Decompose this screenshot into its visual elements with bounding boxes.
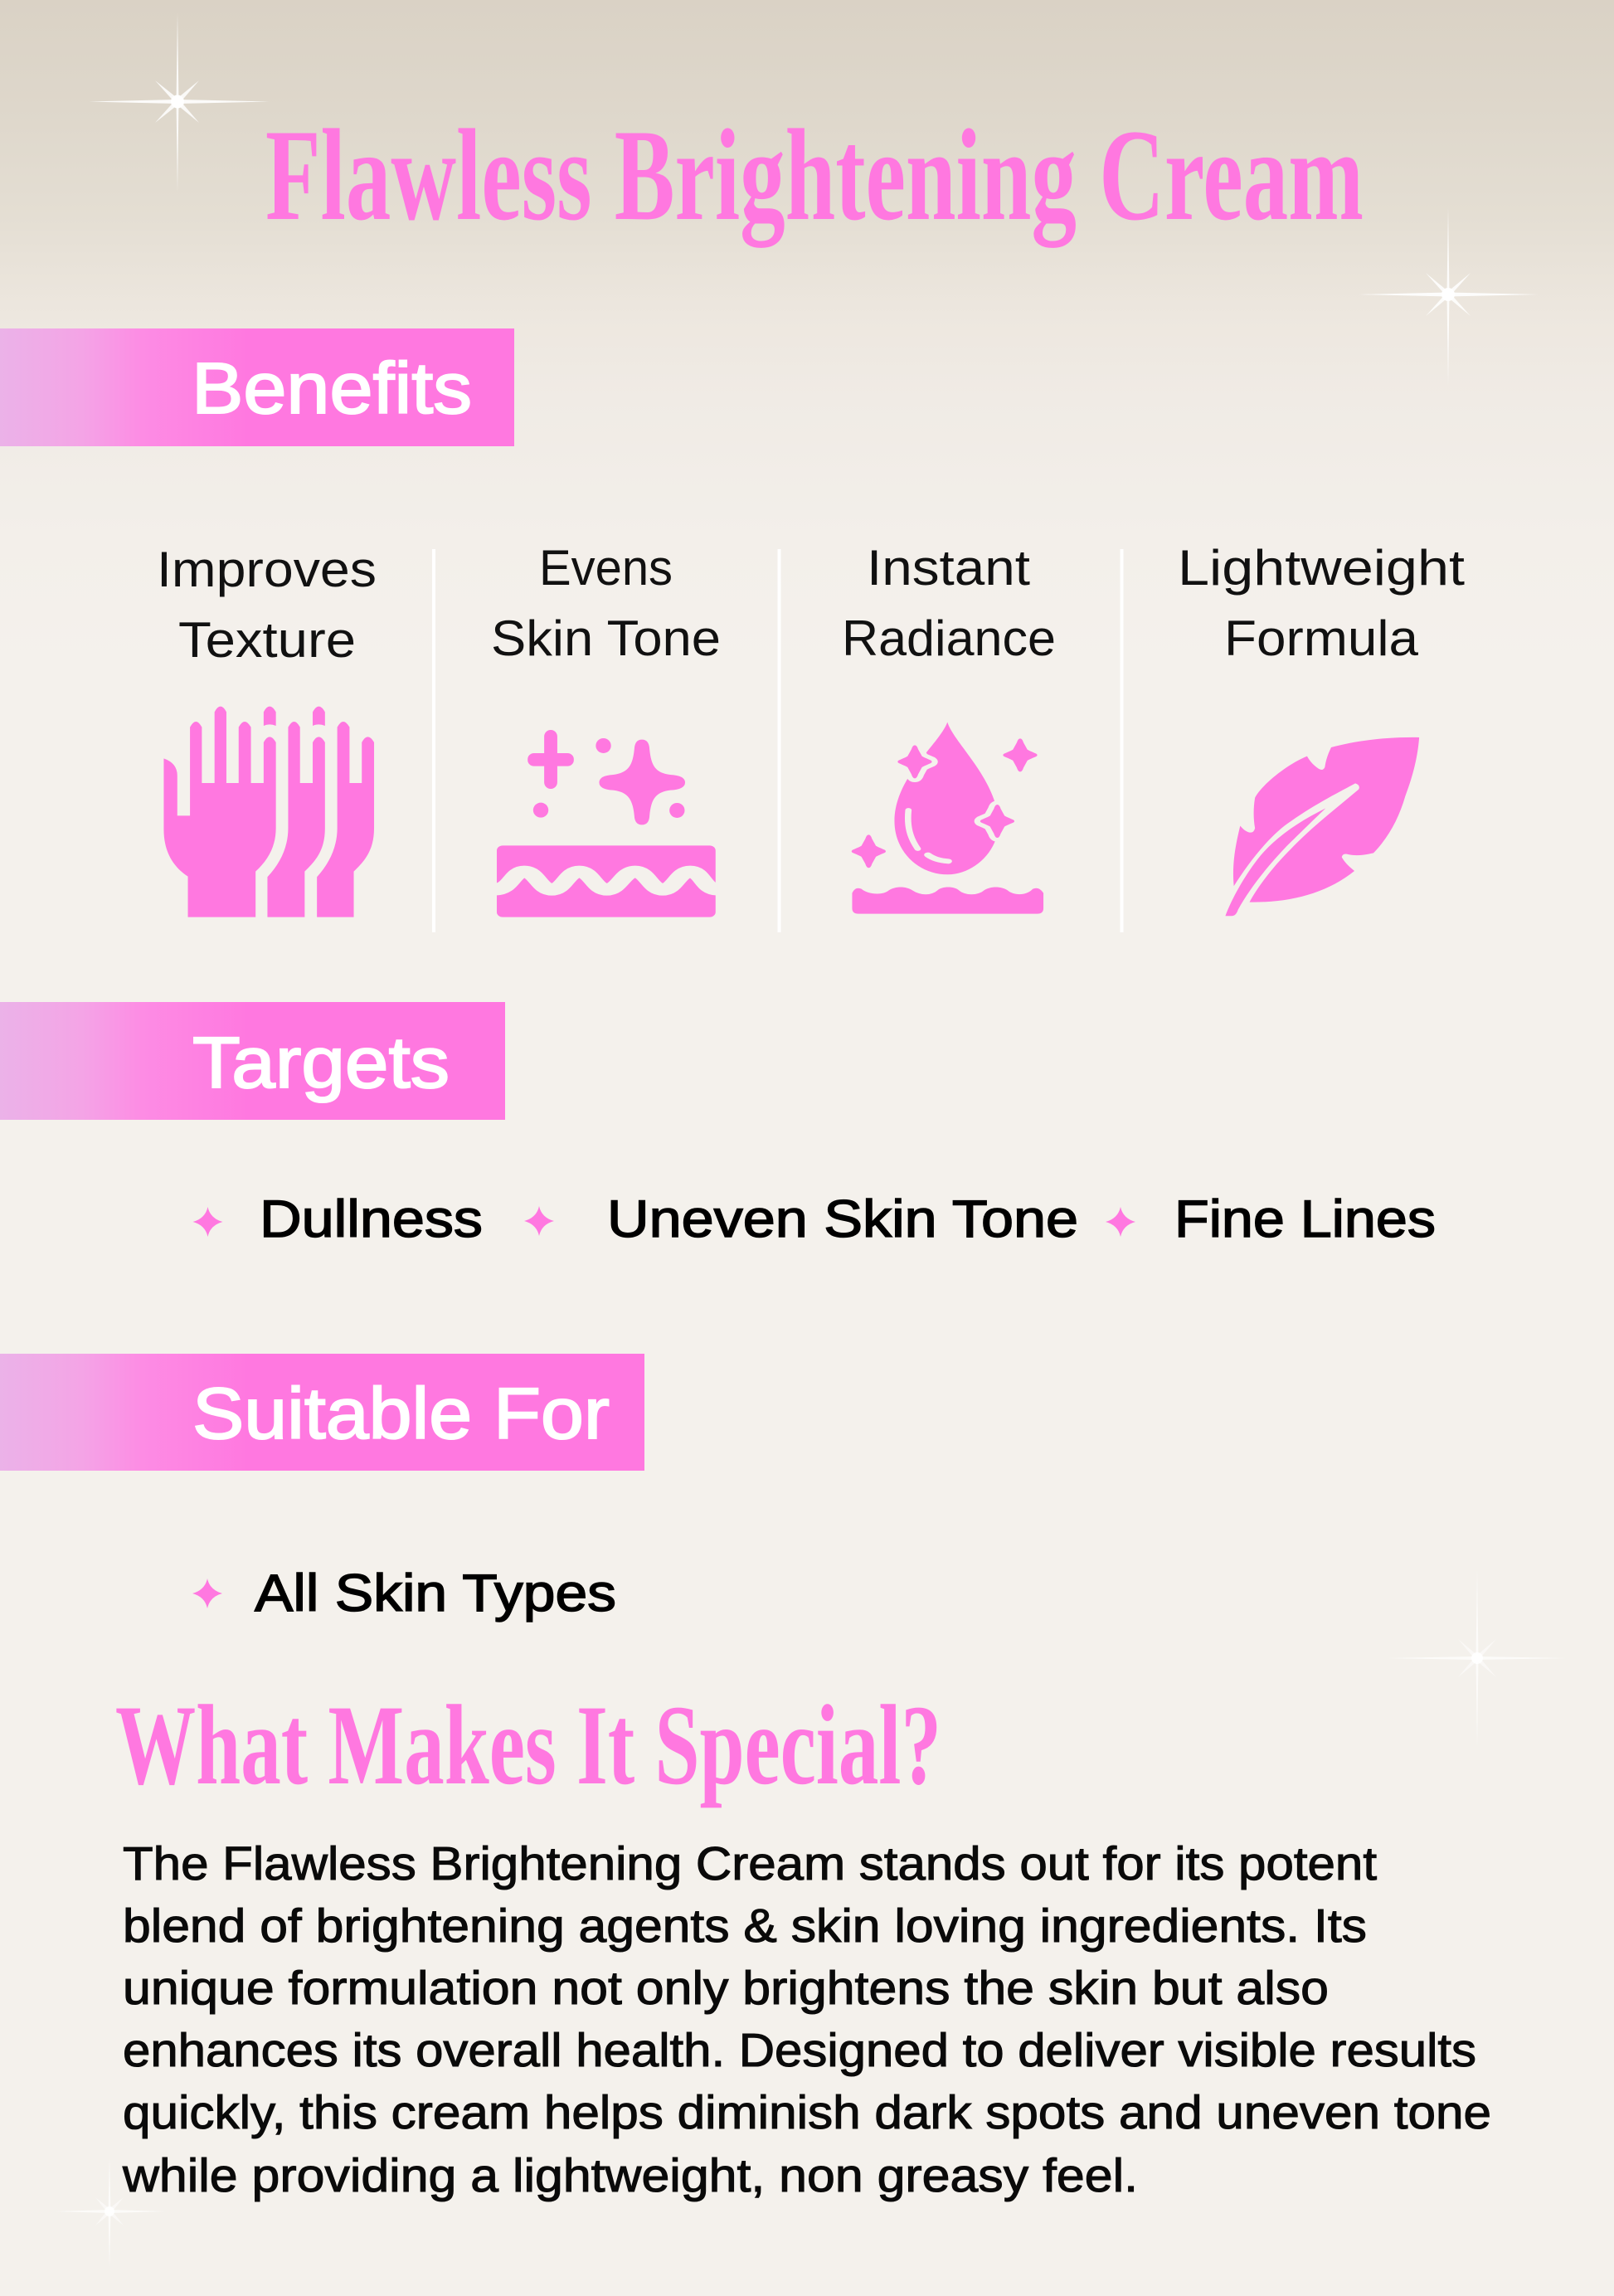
description paragraph: blend of brightening agents & skin loving ingredients. Its: [123, 1900, 1367, 1953]
description paragraph: quickly, this cream helps diminish dark spots and uneven tone: [123, 2086, 1491, 2139]
heading: Targets: [0, 1002, 505, 1120]
benefit: Evens Skin Tone: Evens: [539, 540, 673, 596]
benefit: Instant Radiance: Radiance: [842, 610, 1056, 666]
benefit: Improves Texture: Improves: [157, 542, 377, 597]
icon: hands: [163, 707, 374, 917]
description paragraph: enhances its overall health. Designed to deliver visible results: [123, 2024, 1476, 2077]
benefit: Evens Skin Tone: [491, 540, 721, 917]
benefit: Lightweight Formula: Lightweight: [1178, 540, 1465, 596]
sparkle: top right: [1359, 207, 1539, 386]
description paragraph: while providing a lightweight, non greasy feel.: [122, 2149, 1138, 2202]
benefit: Instant Radiance: Instant: [867, 540, 1030, 596]
heading: Suitable For: Suitable For: [192, 1374, 610, 1454]
sparkle: top left: [89, 12, 270, 192]
icon: feather leaf: [1225, 737, 1419, 916]
target list: [192, 1190, 1436, 1248]
description paragraph: [122, 1837, 1491, 2202]
benefit: Evens Skin Tone: Skin Tone: [491, 610, 721, 666]
benefit: Instant Radiance: [842, 540, 1056, 914]
suitable item: All Skin Types: All Skin Types: [255, 1564, 616, 1622]
target: Fine Lines: Fine Lines: [1174, 1190, 1436, 1248]
benefit: Lightweight Formula: [1178, 540, 1465, 916]
heading: Suitable For: [0, 1354, 644, 1471]
dividers: [432, 549, 1123, 932]
sparkle: bottom left: [55, 2157, 166, 2269]
benefit: Improves Texture: [157, 542, 377, 917]
heading: Targets: Targets: [192, 1023, 450, 1103]
heading: Benefits: [0, 328, 514, 446]
target: Dullness: [192, 1190, 483, 1248]
icon: skin with sparkles: [494, 730, 717, 917]
benefit: Improves Texture: Texture: [178, 612, 356, 668]
target: Dullness: Dullness: [260, 1190, 483, 1248]
target: Uneven Skin Tone: Uneven Skin Tone: [607, 1190, 1078, 1248]
description paragraph: The Flawless Brightening Cream stands out for its potent: [123, 1837, 1377, 1890]
subheading: What Makes It Special?: [115, 1681, 941, 1808]
description paragraph: unique formulation not only brightens the skin but also: [123, 1962, 1329, 2015]
icon: water drop: [852, 722, 1043, 914]
sparkle: mid right: [1387, 1568, 1568, 1749]
benefit: Lightweight Formula: Formula: [1224, 610, 1419, 666]
heading: Benefits: Benefits: [192, 348, 472, 429]
